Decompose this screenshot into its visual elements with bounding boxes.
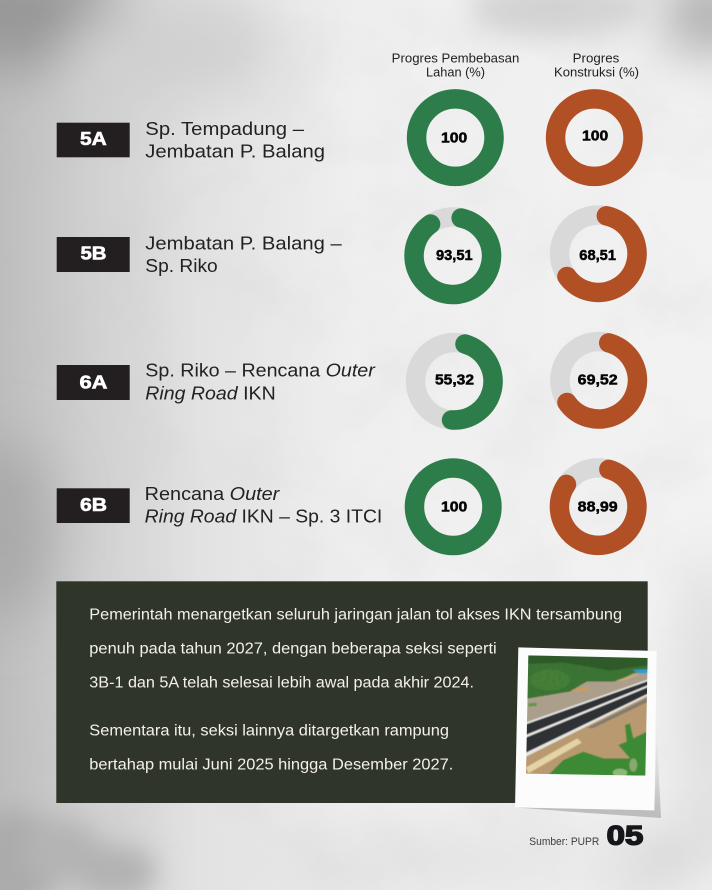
donut: construction 100 [556,99,633,176]
header: construction progress [554,51,639,80]
section name 5B: Sp. Riko [145,256,218,276]
section name 6A: Ring Road IKN [145,383,276,403]
section name 6B: Rencana Outer [145,484,280,504]
panel: summary [56,581,648,803]
header: construction progress: Konstruksi (%) [554,66,639,80]
header: land acquisition progress: Lahan (%) [426,66,485,80]
badge 5B: 5B [80,244,106,264]
donut: land 93,51: 93,51 [436,247,473,264]
badge 6B [57,488,130,523]
row 5A [57,99,633,176]
donut: land 55,32: 55,32 [435,371,474,388]
donut: land 100 [417,99,494,176]
section name 5B [145,233,342,276]
donut: land 93,51 [407,210,499,302]
donut: construction 88,99: 88,99 [578,499,618,516]
section name 6A [145,361,376,403]
summary text: penuh pada tahun 2027, dengan beberapa seksi seperti [89,640,497,657]
section name 6B: Ring Road IKN – Sp. 3 ITCI [145,507,382,527]
summary text [89,606,622,774]
badge 5A [57,123,130,157]
section name 5A [145,119,325,162]
row 5B [57,208,644,302]
donut: construction 68,51: 68,51 [579,247,616,264]
summary text: bertahap mulai Juni 2025 hingga Desember 2027. [89,757,453,774]
badge 6A: 6A [80,372,108,392]
row 6B [57,459,646,555]
section name 6A: Sp. Riko – Rencana Outer [145,361,376,381]
badge 5A: 5A [80,129,107,149]
page number: 05 [607,820,643,850]
header: land acquisition progress: Progres Pembebasan [392,51,519,65]
section name 5A: Sp. Tempadung – [145,119,304,139]
header: land acquisition progress [392,51,519,80]
header: construction progress: Progres [573,51,619,65]
donut: construction 88,99 [550,459,646,555]
row 6A [57,333,646,429]
section name 5A: Jembatan P. Balang [145,142,325,162]
donut: construction 69,52: 69,52 [578,371,618,388]
source note: Sumber: PUPR [529,836,599,848]
badge 6A [57,365,130,400]
donut: construction 100: 100 [582,128,608,145]
photo: polaroid of toll road [515,647,661,818]
donut: construction 68,51 [552,208,644,300]
donut: land 100: 100 [441,499,467,516]
summary text: Pemerintah menargetkan seluruh jaringan jalan tol akses IKN tersambung [89,606,622,623]
donut: construction 69,52 [551,333,646,428]
summary text: 3B-1 dan 5A telah selesai lebih awal pada akhir 2024. [89,674,474,691]
donut: land 100: 100 [441,129,467,146]
column headers [392,51,639,80]
donut: land 100 [414,468,492,546]
section name 5B: Jembatan P. Balang – [145,233,342,253]
summary text: Sementara itu, seksi lainnya ditargetkan rampung [89,723,449,740]
badge 6B: 6B [80,495,107,515]
section name 6B [145,484,382,527]
badge 5B [57,237,130,272]
donut: land 55,32 [406,333,502,429]
